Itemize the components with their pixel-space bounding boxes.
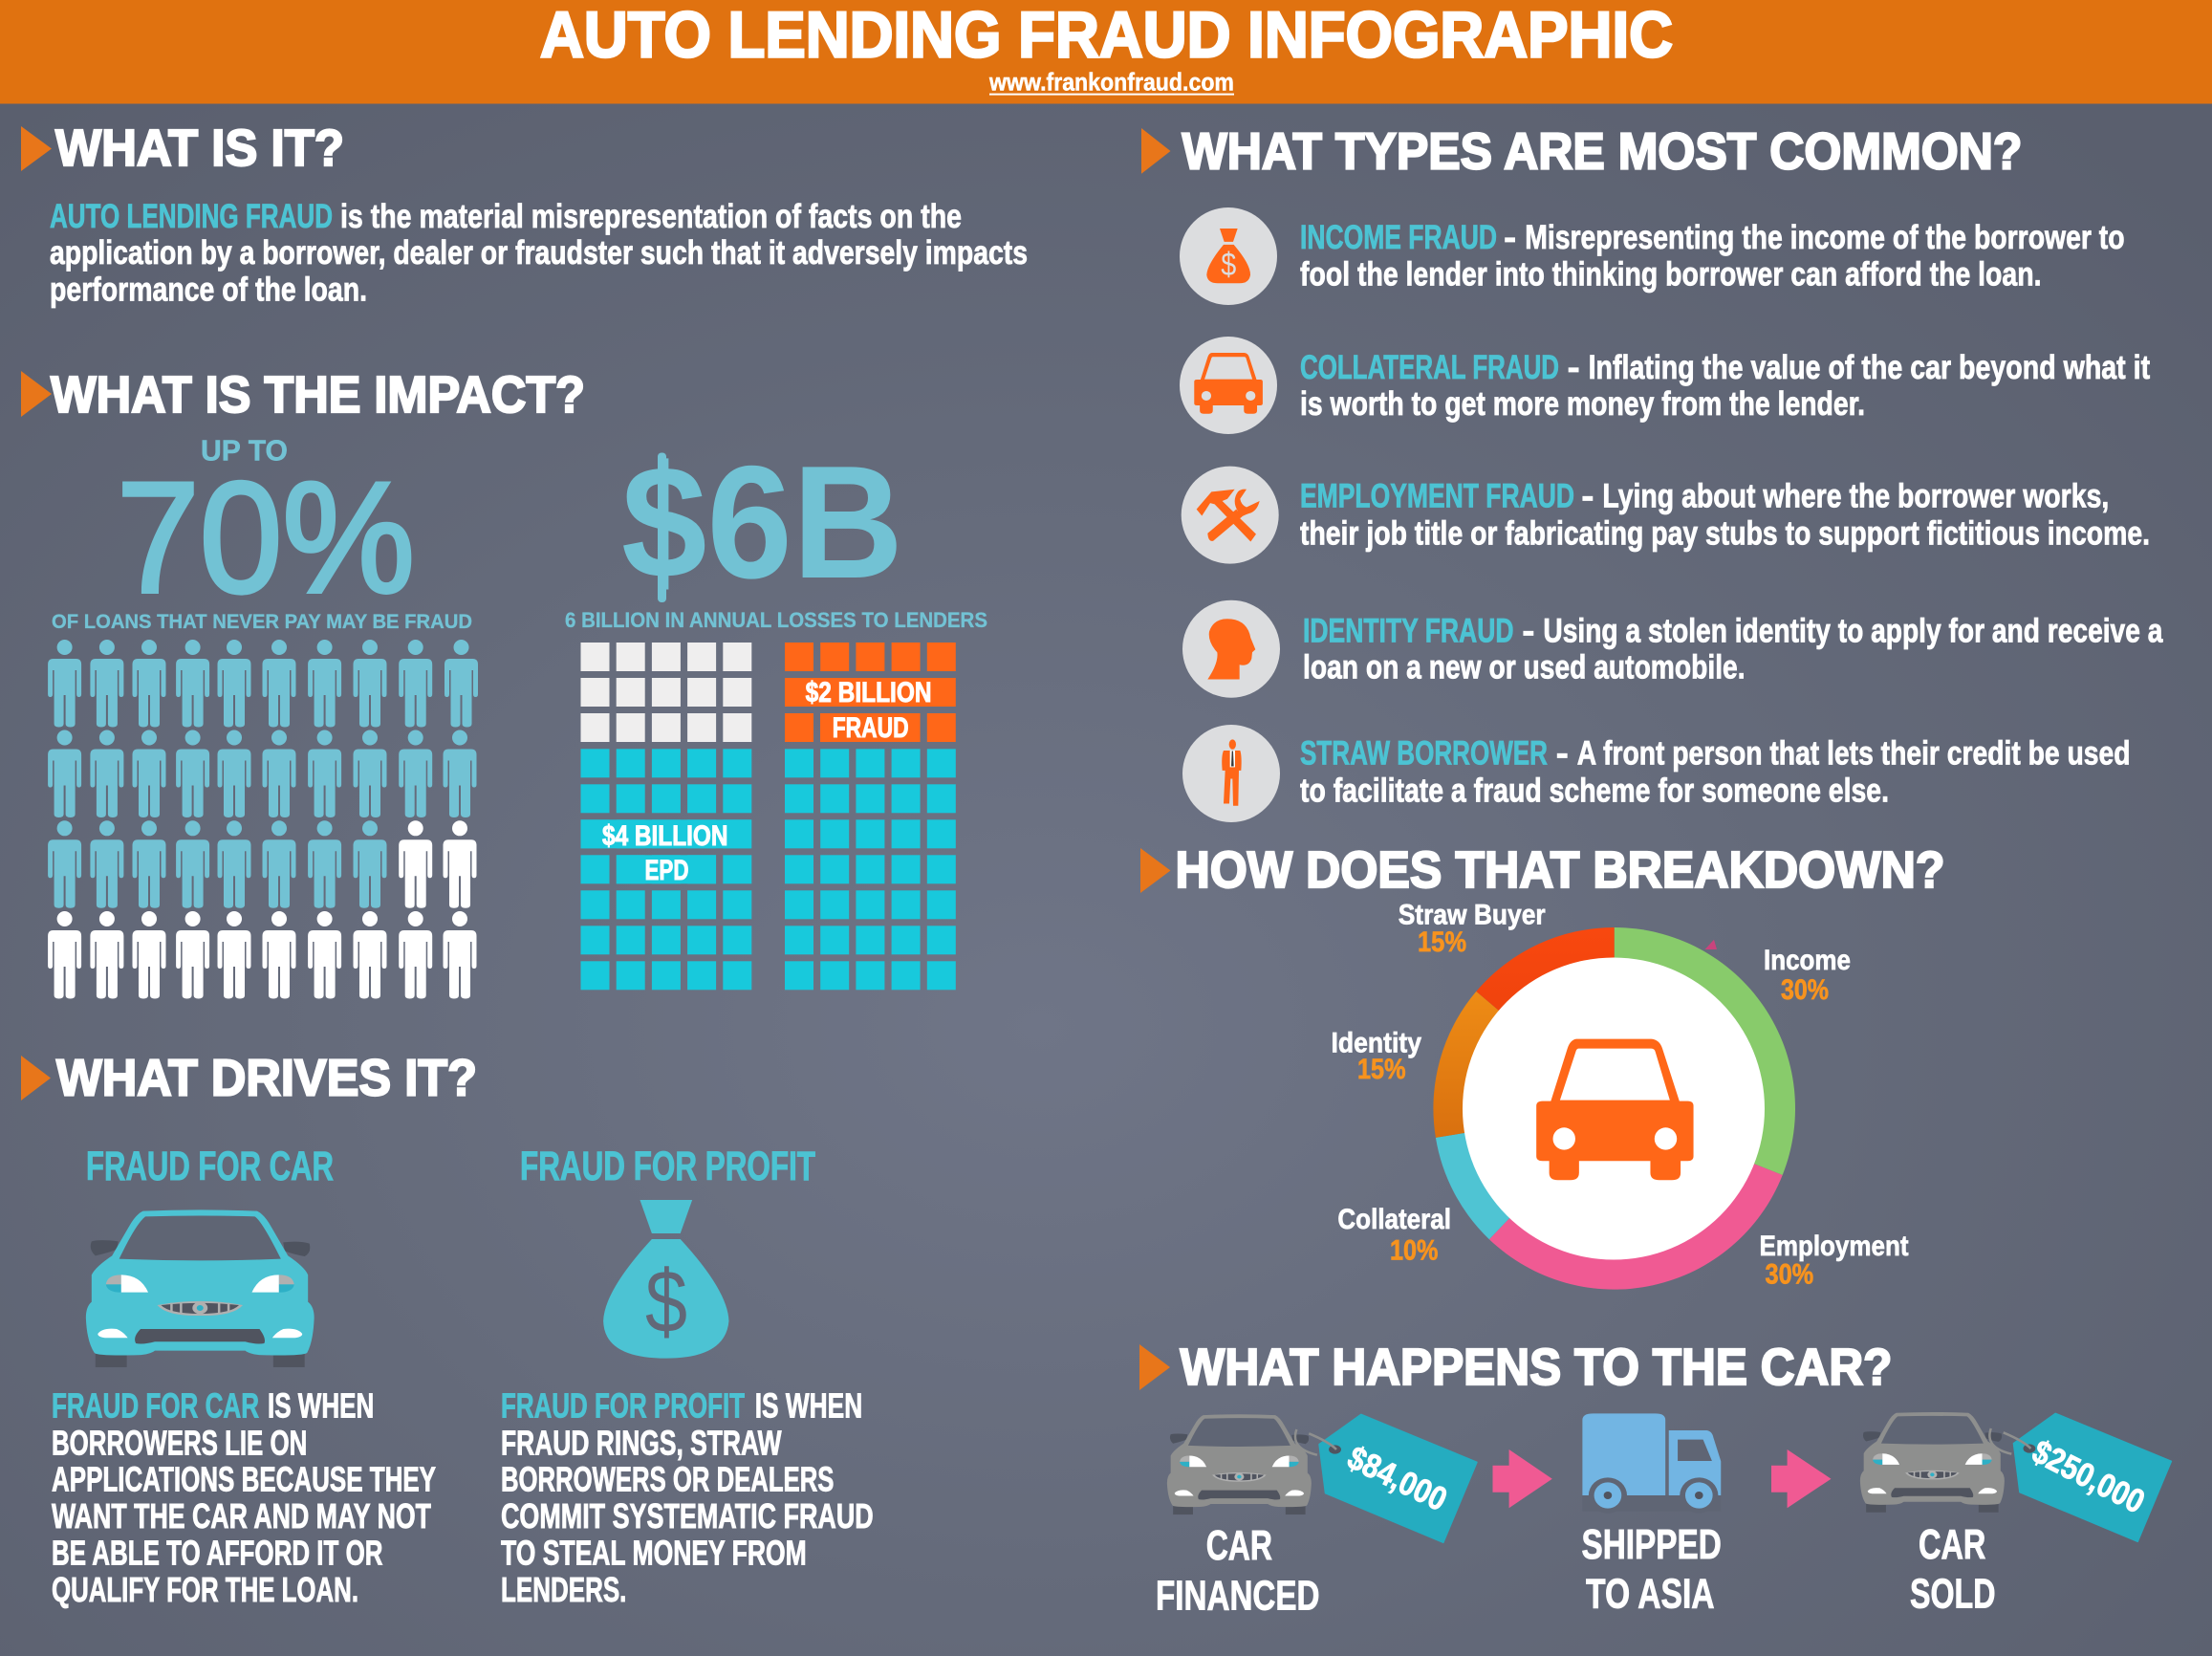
text: income fraud: fool the lender into thinking borrower can afford the loan. (1300, 256, 2042, 294)
text: identity fraud: loan on a new or used automobile. (1303, 648, 1746, 686)
label: identity: Identity (1331, 1028, 1421, 1059)
text: fraud for car explanation: BORROWERS LIE ON (52, 1423, 307, 1462)
icon: financed car with price tag: $84,000 (1342, 1439, 1453, 1518)
icon: money bag badge: $ (1221, 247, 1236, 283)
text: fraud for profit explanation: TO STEAL MONEY FROM (501, 1534, 807, 1573)
text: straw borrower: to facilitate a fraud scheme for someone else. (1300, 772, 1889, 809)
text: employment fraud: Lying about where the borrower works, (1602, 477, 2109, 514)
label: car sold: SOLD (1910, 1571, 1996, 1618)
pictogram: people (48, 640, 478, 998)
stat: 6 billion (565, 432, 987, 632)
heading: what happens to the car: WHAT HAPPENS TO THE CAR? (1180, 1339, 1893, 1396)
definition text (50, 198, 1028, 308)
stat: 70 percent (52, 434, 472, 633)
text: fraud for profit explanation (501, 1386, 874, 1609)
label: income (1764, 945, 1851, 1006)
label: straw buyer: 15% (1418, 926, 1466, 958)
icon: heading arrow (21, 371, 52, 417)
row: collateral fraud (1180, 337, 2150, 434)
text: identity fraud (1303, 612, 2163, 686)
heading: what is the impact: WHAT IS THE IMPACT? (51, 366, 585, 424)
panel: most common types (1141, 123, 2163, 822)
label: employment (1759, 1231, 1909, 1291)
label: employment: Employment (1759, 1231, 1909, 1262)
panel: what drives it (21, 1050, 874, 1609)
label: identity (1331, 1028, 1421, 1085)
text: fraud for profit explanation: COMMIT SYSTEMATIC FRAUD (501, 1496, 874, 1536)
text: fraud for car explanation: IS WHEN (268, 1386, 374, 1426)
text: fraud for car explanation: FRAUD FOR CAR (52, 1386, 259, 1426)
text: income fraud: INCOME FRAUD (1300, 219, 1497, 256)
icon: heading arrow (21, 1056, 51, 1100)
text: fraud for car explanation: QUALIFY FOR THE LOAN. (52, 1570, 358, 1609)
text: collateral fraud (1300, 349, 2150, 423)
text: straw borrower: - (1556, 734, 1569, 772)
icon: head badge (1182, 600, 1280, 698)
row: straw borrower (1182, 725, 2130, 822)
heading: what drives it: WHAT DRIVES IT? (56, 1050, 477, 1107)
panel: breakdown (1140, 841, 1944, 1291)
text: fraud for car explanation: BE ABLE TO AFFORD IT OR (52, 1534, 382, 1573)
icon: money bag: $ (645, 1252, 687, 1351)
definition text: performance of the loan. (50, 272, 367, 308)
panel: what is it (21, 120, 1028, 308)
text: straw borrower (1300, 734, 2130, 809)
subheading: fraud for profit: FRAUD FOR PROFIT (520, 1144, 815, 1189)
icon: sold car with price tag (1860, 1412, 2171, 1541)
stat: 6 billion: 6 BILLION IN ANNUAL LOSSES TO LENDERS (565, 608, 987, 632)
text: identity fraud: IDENTITY FRAUD (1303, 612, 1514, 650)
icon: center car (1536, 1039, 1694, 1180)
row: income fraud (1180, 207, 2125, 305)
icon: car badge (1180, 337, 1277, 434)
text: income fraud: - (1504, 219, 1516, 256)
icon: teal car (86, 1209, 314, 1367)
icon: sold car with price tag: $250,000 (2027, 1433, 2151, 1521)
label: employment: 30% (1765, 1259, 1813, 1291)
stat: 70 percent: UP TO (201, 434, 288, 467)
label: car sold (1910, 1521, 1996, 1618)
text: fraud for profit explanation: IS WHEN (755, 1386, 862, 1426)
title: AUTO LENDING FRAUD INFOGRAPHIC (540, 0, 1673, 71)
label: collateral: Collateral (1337, 1204, 1451, 1235)
text: collateral fraud: COLLATERAL FRAUD (1300, 349, 1559, 386)
label: collateral: 10% (1390, 1235, 1438, 1267)
text: collateral fraud: is worth to get more money from the lender. (1300, 385, 1865, 423)
text: fraud for car explanation (52, 1386, 436, 1609)
icon: heading arrow (1140, 848, 1170, 893)
text: income fraud (1300, 219, 2125, 294)
waffle chart: 4 billion EPD: $4 BILLION (602, 820, 728, 852)
text: employment fraud (1300, 477, 2150, 552)
subheading: fraud for car: FRAUD FOR CAR (86, 1144, 334, 1189)
label: shipped to asia: SHIPPED (1581, 1521, 1722, 1568)
heading: most common types: WHAT TYPES ARE MOST COMMON? (1182, 123, 2023, 181)
heading: what is it: WHAT IS IT? (55, 120, 344, 177)
label: collateral (1337, 1204, 1451, 1267)
text: fraud for profit explanation: LENDERS. (501, 1570, 626, 1609)
text: fraud for car explanation: APPLICATIONS BECAUSE THEY (52, 1459, 436, 1498)
text: employment fraud: EMPLOYMENT FRAUD (1300, 477, 1574, 514)
text: fraud for car explanation: WANT THE CAR AND MAY NOT (52, 1496, 431, 1536)
label: car financed: CAR (1206, 1522, 1272, 1569)
row: employment fraud (1182, 467, 2150, 564)
row: identity fraud (1182, 600, 2163, 698)
icon: suited person badge (1182, 725, 1280, 822)
label: shipped to asia (1581, 1521, 1722, 1618)
text: fraud for profit explanation: FRAUD RINGS, STRAW (501, 1423, 782, 1462)
waffle chart: 2 billion fraud: $2 BILLION (806, 677, 932, 708)
icon: financed car with price tag (1167, 1414, 1477, 1542)
text: straw borrower: STRAW BORROWER (1300, 734, 1548, 772)
text: collateral fraud: - (1568, 349, 1580, 386)
stat: 6 billion: $6B (621, 432, 903, 612)
label: income: Income (1764, 945, 1851, 976)
icon: tools badge (1182, 467, 1279, 564)
panel: what is the impact (21, 366, 987, 998)
label: car sold: CAR (1919, 1521, 1985, 1568)
waffle chart: 2 billion fraud: FRAUD (833, 712, 909, 744)
donut chart (1433, 927, 1795, 1290)
label: straw buyer: Straw Buyer (1399, 900, 1546, 931)
icon: heading arrow (1139, 1344, 1170, 1390)
definition text: AUTO LENDING FRAUD (50, 198, 333, 235)
icon: heading arrow (1141, 128, 1170, 174)
label: car financed (1156, 1522, 1319, 1620)
arrow: shipped to sold (1771, 1449, 1832, 1508)
text: fraud for profit explanation: BORROWERS OR DEALERS (501, 1459, 834, 1498)
waffle chart: 2 billion fraud (785, 643, 956, 990)
label: shipped to asia: TO ASIA (1586, 1571, 1715, 1618)
panel: what happens to the car (1139, 1339, 2171, 1620)
icon: money bag badge (1180, 207, 1277, 305)
text: employment fraud: - (1581, 477, 1594, 514)
heading: breakdown: HOW DOES THAT BREAKDOWN? (1176, 841, 1944, 899)
text: identity fraud: - (1522, 612, 1534, 650)
arrow: financed to shipped (1493, 1449, 1552, 1508)
definition text: is the material misrepresentation of facts on the (340, 198, 962, 235)
header banner (0, 0, 2212, 103)
website link: www.frankonfraud.com (988, 67, 1234, 96)
label: identity: 15% (1357, 1054, 1405, 1085)
definition text: application by a borrower, dealer or fraudster such that it adversely impacts (50, 234, 1028, 272)
icon: delivery truck (1582, 1413, 1721, 1514)
waffle chart: 4 billion EPD (581, 643, 751, 990)
text: fraud for profit explanation: FRAUD FOR PROFIT (501, 1386, 745, 1426)
stat: 70 percent: 70% (117, 449, 415, 625)
stat: 70 percent: OF LOANS THAT NEVER PAY MAY BE FRAUD (52, 611, 472, 633)
label: car financed: FINANCED (1156, 1572, 1319, 1620)
icon: heading arrow (21, 126, 52, 171)
label: income: 30% (1781, 974, 1829, 1006)
icon: money bag (603, 1200, 728, 1359)
label: straw buyer (1399, 900, 1546, 958)
waffle chart: 4 billion EPD: EPD (644, 855, 688, 886)
